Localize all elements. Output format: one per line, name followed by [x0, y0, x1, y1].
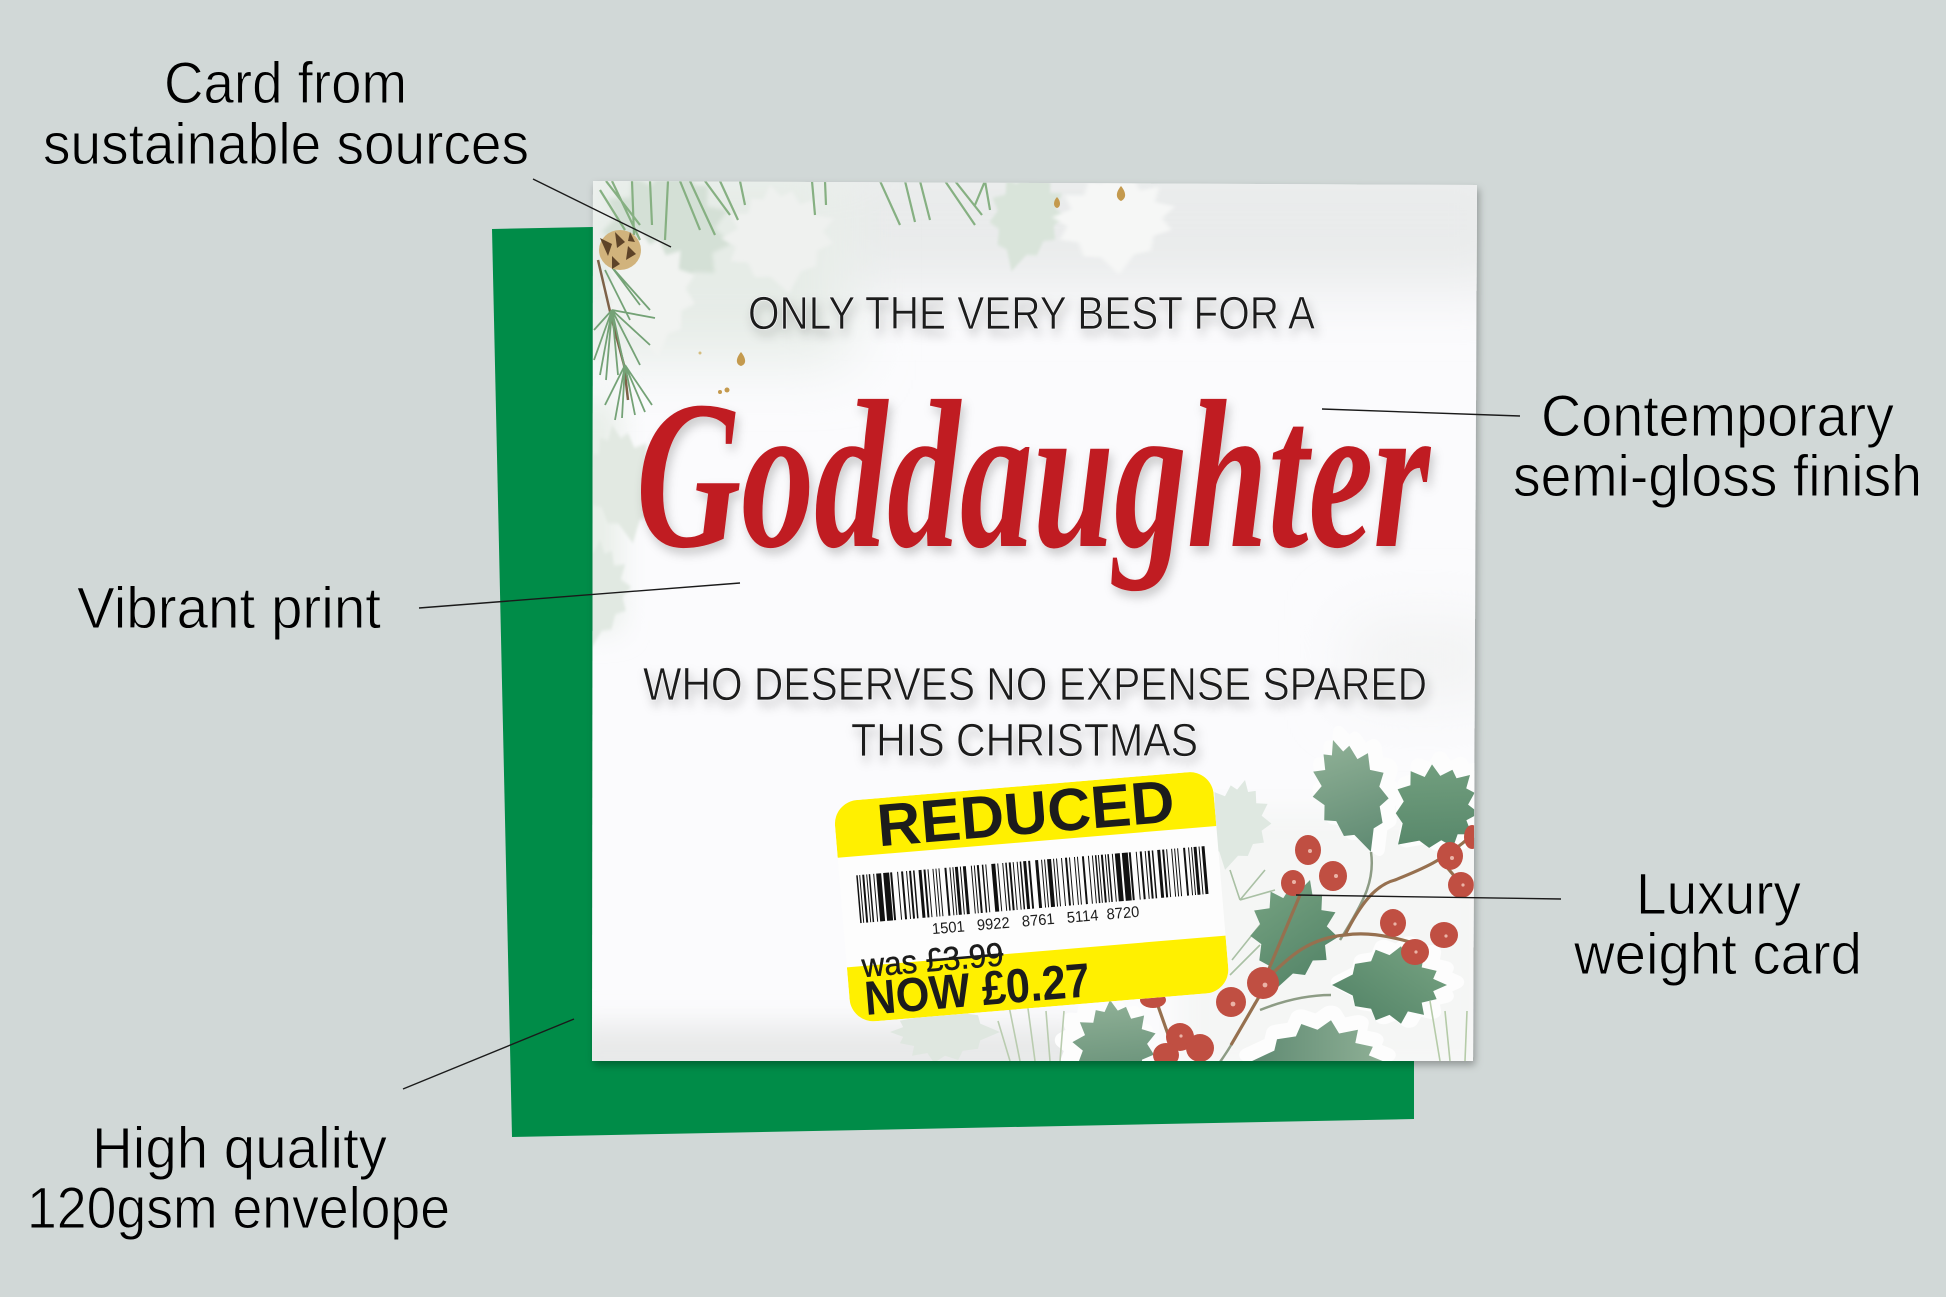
gold specks: [737, 186, 1125, 366]
barcode digits: 1501 9922 8761 5114 8720: [931, 904, 1140, 938]
reduced price sticker: [832, 764, 1231, 1027]
label: high quality 120gsm envelope: [27, 1116, 450, 1241]
label: vibrant print: Vibrant print: [77, 576, 381, 641]
sticker heading: REDUCED: [874, 768, 1177, 859]
label: high quality 120gsm envelope: 120gsm envelope: [27, 1176, 450, 1241]
lower card text: THIS CHRISTMAS: [851, 714, 1198, 766]
leader lines: [403, 179, 1561, 1089]
label: contemporary semi-gloss finish: [1513, 384, 1922, 509]
icon: holly leaves and berries: [890, 723, 1509, 1104]
label: card from sustainable sources: Card from: [164, 51, 407, 116]
label: luxury weight card: weight card: [1573, 922, 1862, 987]
label: card from sustainable sources: [43, 51, 529, 177]
lower card text: [643, 658, 1427, 766]
now price: NOW £0.27: [862, 954, 1092, 1026]
card name in red script: Goddaughter: [636, 357, 1432, 592]
label: high quality 120gsm envelope: High quality: [92, 1116, 387, 1181]
card watercolour wash: [555, 142, 1520, 1085]
label: contemporary semi-gloss finish: Contemporary: [1541, 384, 1894, 449]
label: luxury weight card: [1573, 862, 1862, 987]
label: card from sustainable sources: sustainable sources: [43, 112, 529, 177]
barcode: [858, 870, 1207, 899]
lower card text: WHO DESERVES NO EXPENSE SPARED: [643, 658, 1427, 710]
label: luxury weight card: Luxury: [1636, 862, 1801, 927]
was price: was £3.99: [859, 935, 1005, 984]
label: contemporary semi-gloss finish: semi-gloss finish: [1513, 444, 1922, 509]
card: [590, 181, 1483, 1069]
envelope: [492, 227, 1414, 1137]
icon: pine sprigs and cone: [594, 181, 1125, 420]
top card text: ONLY THE VERY BEST FOR A: [748, 287, 1315, 339]
